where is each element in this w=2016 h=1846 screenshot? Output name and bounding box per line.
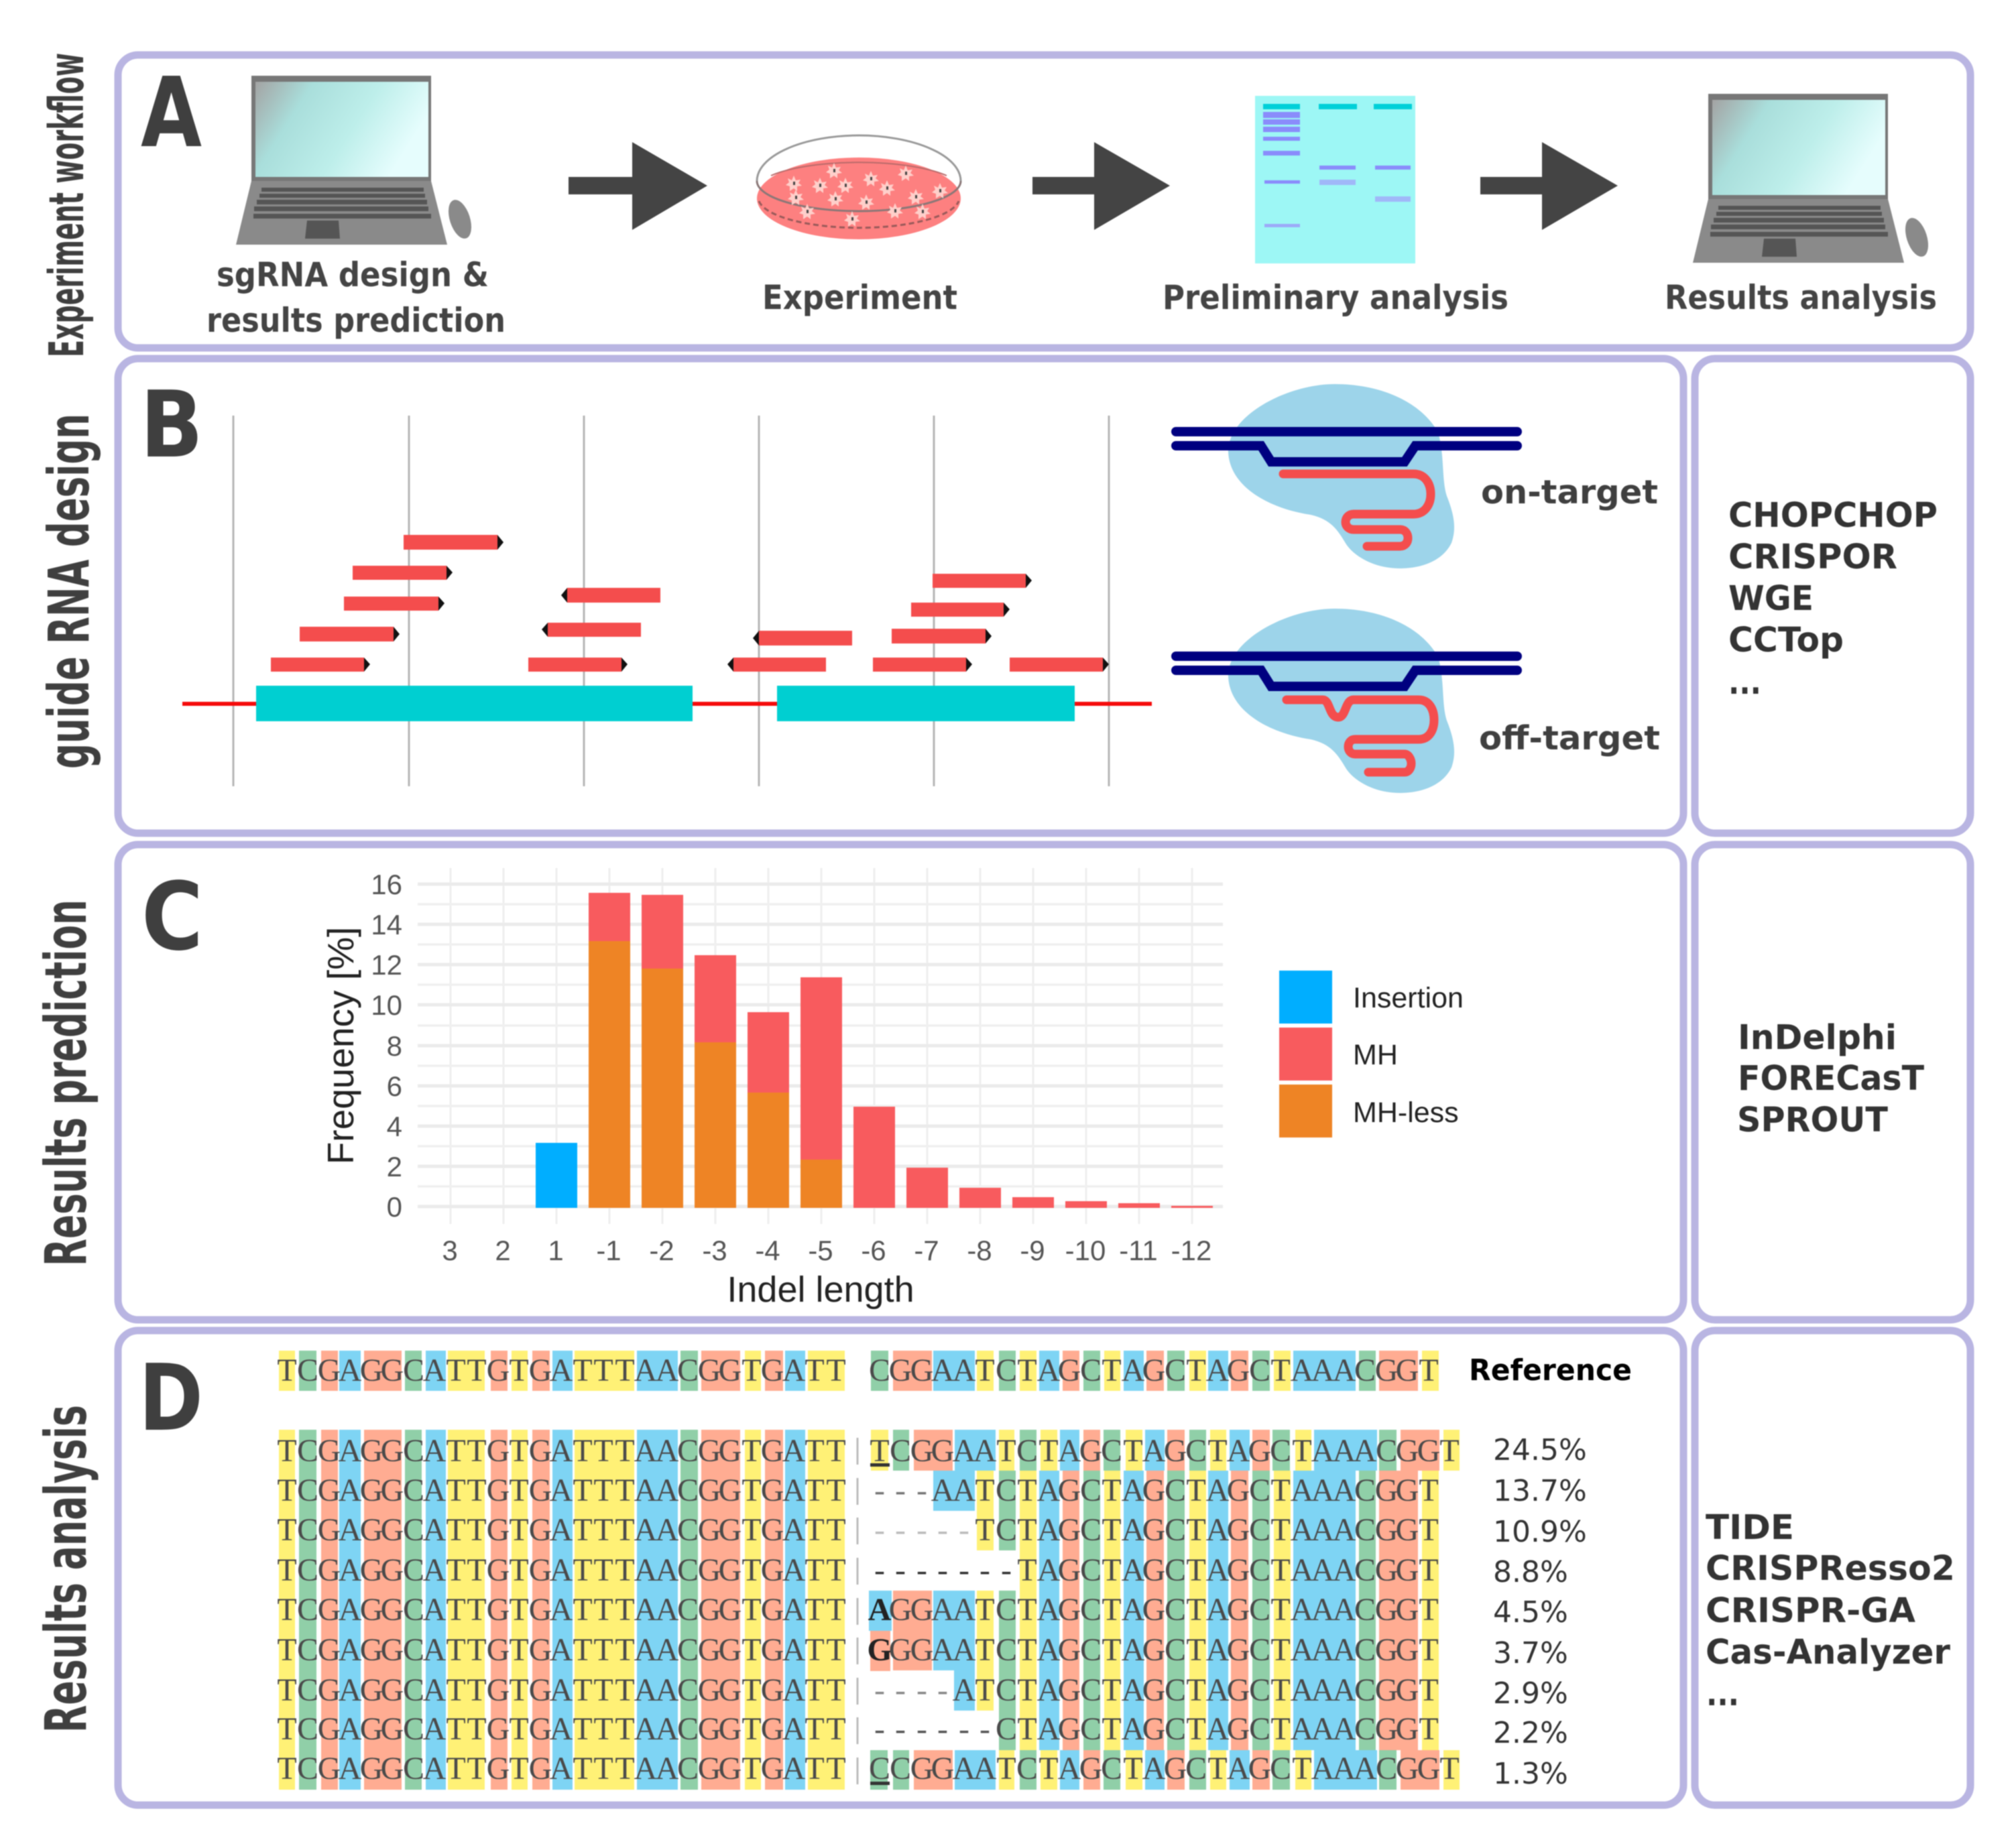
bar chart: indel frequency: -5 [808, 1235, 833, 1266]
side title: Results prediction: Results prediction [33, 900, 100, 1266]
label: sgRNA design and results prediction: sgRNA design & [217, 255, 489, 294]
panel: analysis tools: TIDE [1706, 1508, 1794, 1548]
panel: prediction tools: InDelphi [1738, 1018, 1897, 1058]
diagram: off-target Cas9 [1176, 609, 1517, 793]
legend: MH-less [1353, 1097, 1459, 1129]
panel letter B: B [140, 372, 203, 479]
bar chart: indel frequency: 0 [387, 1191, 402, 1223]
bar chart: indel frequency: -1 [596, 1235, 621, 1266]
read frequencies: 4.5% [1493, 1595, 1568, 1629]
bar chart: indel frequency: -7 [914, 1235, 939, 1266]
alignment of edited reads: TCGGAATCTAGCTAGCTAGCTAAACGGT [870, 1433, 1460, 1469]
arrow 2 [1032, 142, 1170, 230]
bar chart: indel frequency [320, 868, 1223, 1310]
panel: guide RNA design [36, 359, 1683, 833]
label: Experiment: Experiment [762, 278, 957, 317]
read frequencies: 24.5% [1493, 1433, 1587, 1467]
alignment of edited reads: TCGAGGCATTGTGATTTAACGGTGATT [277, 1632, 846, 1668]
panel: analysis tools: Cas-Analyzer [1706, 1633, 1950, 1672]
alignment of edited reads: ----ATCTAGCTAGCTAGCTAAACGGT [874, 1672, 1439, 1708]
read frequencies: 8.8% [1493, 1555, 1568, 1589]
alignment of edited reads: TCGAGGCATTGTGATTTAACGGTGATT [277, 1473, 846, 1508]
bar chart: indel frequency: 1 [548, 1235, 564, 1266]
alignment of edited reads: TCGAGGCATTGTGATTTAACGGTGATT [277, 1552, 846, 1588]
bar chart: indel frequency: 12 [371, 949, 402, 981]
read frequencies: 13.7% [1493, 1474, 1587, 1508]
legend [1279, 971, 1464, 1137]
panel: analysis tools: CRISPR-GA [1706, 1591, 1916, 1631]
arrow 1 [569, 142, 707, 230]
panel letter C: C [141, 863, 203, 972]
alignment of edited reads: TCGAGGCATTGTGATTTAACGGTGATT [277, 1433, 846, 1469]
gene model with guide positions [182, 416, 1152, 786]
panel: guide design tools: WGE [1728, 579, 1814, 619]
bar chart: indel frequency: -12 [1171, 1235, 1211, 1266]
panel: analysis tools: ... [1706, 1674, 1739, 1714]
panel: results analysis [33, 1331, 1683, 1805]
panel: prediction tools [1695, 845, 1970, 1320]
alignment of edited reads: TCGAGGCATTGTGATTTAACGGTGATT [277, 1512, 846, 1548]
panel: guide design tools: CHOPCHOP [1728, 496, 1938, 536]
label: Preliminary analysis: Preliminary analysis [1163, 278, 1508, 317]
alignment of edited reads: -----TCTAGCTAGCTAGCTAAACGGT [874, 1512, 1439, 1548]
label: sgRNA design and results prediction [206, 255, 506, 340]
bar chart: indel frequency: -3 [702, 1235, 727, 1266]
reference sequence row: CGGAATCTAGCTAGCTAGCTAAACGGT [869, 1353, 1439, 1388]
panel: guide design tools: CRISPOR [1728, 538, 1897, 577]
bar chart: indel frequency: -8 [967, 1235, 992, 1266]
alignment of edited reads: CCGGAATCTAGCTAGCTAGCTAAACGGT [869, 1751, 1460, 1786]
icon: electrophoresis gel [1255, 96, 1415, 263]
alignment of edited reads: AGGAATCTAGCTAGCTAGCTAAACGGT [868, 1592, 1439, 1627]
alignment of edited reads: ------CTAGCTAGCTAGCTAAACGGT [874, 1711, 1439, 1747]
legend: Insertion [1353, 982, 1464, 1014]
bar chart: indel frequency: 3 [442, 1235, 458, 1266]
alignment of edited reads: TCGAGGCATTGTGATTTAACGGTGATT [277, 1672, 846, 1708]
read frequencies: 1.3% [1493, 1757, 1568, 1791]
icon: laptop results [1693, 94, 1933, 263]
bar chart: indel frequency: -11 [1119, 1235, 1158, 1266]
alignment of edited reads: GGGAATCTAGCTAGCTAGCTAAACGGT [867, 1632, 1439, 1668]
bar chart: indel frequency: 2 [387, 1151, 402, 1182]
bar chart: indel frequency: -9 [1020, 1235, 1045, 1266]
bar chart: indel frequency: 4 [387, 1111, 402, 1142]
panel: prediction tools: SPROUT [1737, 1101, 1888, 1140]
alignment of edited reads [277, 1430, 1460, 1790]
read frequencies: 2.9% [1493, 1676, 1568, 1711]
label: Results analysis: Results analysis [1665, 278, 1937, 317]
bar chart: indel frequency: 2 [495, 1235, 511, 1266]
bar chart: indel frequency: 14 [371, 909, 402, 940]
alignment of edited reads: -------TAGCTAGCTAGCTAAACGGT [874, 1552, 1439, 1588]
panel: guide design tools: ... [1728, 663, 1761, 702]
reference sequence row: Reference [1469, 1353, 1632, 1388]
read frequencies: 10.9% [1493, 1515, 1587, 1549]
read frequencies: 2.2% [1493, 1716, 1568, 1750]
reference sequence row: TCGAGGCATTGTGATTTAACGGTGATT [277, 1353, 846, 1388]
icon: laptop design [236, 76, 476, 245]
panel letter D: D [139, 1345, 203, 1452]
bar chart: indel frequency: -10 [1065, 1235, 1106, 1266]
panel: analysis tools [1695, 1331, 1970, 1805]
panel: prediction tools: FORECasT [1738, 1059, 1924, 1099]
legend: MH [1353, 1039, 1398, 1071]
bar chart: indel frequency: 16 [371, 869, 402, 900]
side title: guide RNA design: guide RNA design [36, 414, 102, 769]
bar chart: indel frequency: -4 [755, 1235, 780, 1266]
bar chart: indel frequency: 10 [371, 989, 402, 1021]
bar chart: indel frequency: 8 [387, 1030, 402, 1062]
panel: results prediction [33, 845, 1683, 1320]
panel: analysis tools: CRISPResso2 [1706, 1549, 1955, 1589]
bar chart: indel frequency: 6 [387, 1070, 402, 1102]
alignment of edited reads: TCGAGGCATTGTGATTTAACGGTGATT [277, 1711, 846, 1747]
label: on-target: on-target [1481, 473, 1658, 511]
read frequencies: 3.7% [1493, 1636, 1568, 1670]
bar chart: indel frequency: -2 [649, 1235, 674, 1266]
arrow 3 [1480, 142, 1618, 230]
panel: guide design tools [1695, 359, 1970, 833]
diagram: on-target Cas9 [1176, 384, 1517, 568]
side title: Results analysis: Results analysis [33, 1405, 100, 1733]
label: off-target: off-target [1479, 719, 1660, 757]
alignment of edited reads: ---AATCTAGCTAGCTAGCTAAACGGT [874, 1473, 1439, 1508]
icon: petri dish [757, 135, 961, 239]
reference sequence row [277, 1351, 1632, 1391]
bar chart: indel frequency: Indel length [727, 1270, 914, 1310]
bar chart: indel frequency: Frequency [%] [320, 927, 361, 1164]
alignment of edited reads: TCGAGGCATTGTGATTTAACGGTGATT [277, 1751, 846, 1786]
read frequencies [1493, 1433, 1587, 1791]
panel letter A: A [141, 56, 202, 169]
alignment of edited reads: TCGAGGCATTGTGATTTAACGGTGATT [277, 1592, 846, 1627]
panel: experiment workflow [39, 53, 1970, 357]
label: sgRNA design and results prediction: results prediction [206, 301, 506, 340]
panel: guide design tools: CCTop [1728, 621, 1844, 660]
bar chart: indel frequency: -6 [861, 1235, 886, 1266]
